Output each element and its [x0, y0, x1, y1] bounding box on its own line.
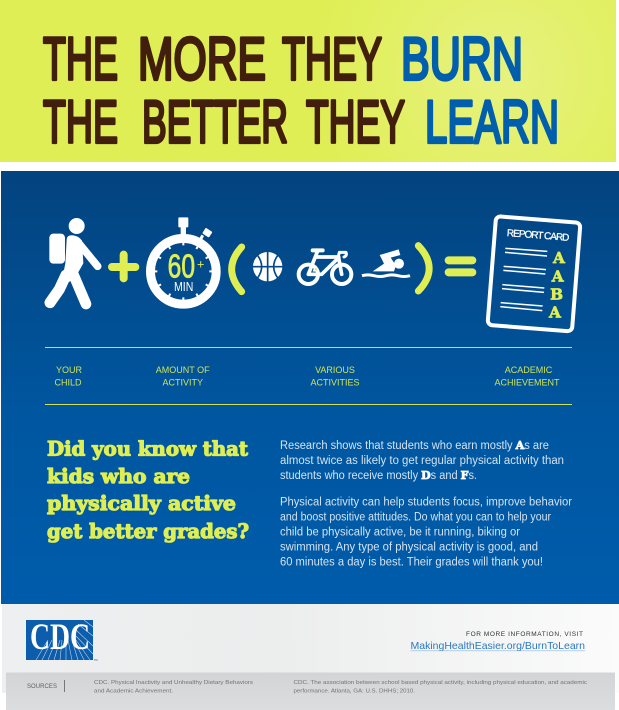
- title: MORE: [138, 26, 266, 93]
- icon: stopwatch 60+ min: [150, 217, 216, 304]
- title: [43, 26, 559, 156]
- source citation 2: [294, 680, 587, 694]
- labels row: CHILD: [54, 378, 82, 388]
- icon: left parenthesis: [232, 247, 242, 292]
- title: BURN: [401, 26, 523, 93]
- body text paragraph 2: [280, 496, 572, 568]
- title: THE: [43, 88, 118, 156]
- question heading: [47, 436, 249, 543]
- body text paragraph 2: swimming. Any type of physical activity is good, and: [280, 542, 538, 554]
- body text paragraph 1: students who receive mostly Ds and Fs.: [280, 468, 477, 482]
- CDC logo: CDC: [30, 617, 90, 658]
- icon: plus: [112, 255, 135, 278]
- labels row: ACHIEVEMENT: [494, 378, 560, 388]
- title: THEY: [282, 26, 382, 93]
- icon: equals: [449, 260, 472, 272]
- labels row: ACTIVITY: [162, 378, 203, 388]
- labels row: ACTIVITIES: [310, 378, 360, 388]
- icon: swimmer: [362, 249, 410, 276]
- body text paragraph 1: Research shows that students who earn mostly As are: [280, 438, 549, 452]
- source citation 1: [94, 680, 253, 694]
- title: BETTER: [142, 88, 288, 156]
- body text paragraph 2: child be physically active, be it running, biking or: [280, 526, 520, 538]
- icon: stopwatch 60+ min: +: [197, 258, 204, 272]
- title: THE: [43, 26, 118, 93]
- sources band: [6, 672, 615, 710]
- source citation 1: CDC. Physical Inactivity and Unhealthy Dietary Behaviors: [94, 680, 253, 686]
- body text paragraph 1: [280, 438, 564, 482]
- sources label: SOURCES: [27, 684, 57, 690]
- icon: report card: A: [552, 249, 566, 267]
- link underline: [410, 650, 585, 652]
- labels row: YOUR: [56, 365, 82, 375]
- divider bottom: [45, 404, 572, 405]
- question heading: kids who are: [47, 464, 190, 488]
- website link: MakingHealthEasier.org/BurnToLearn: [410, 640, 585, 652]
- question heading: get better grades?: [47, 519, 249, 543]
- for more information: FOR MORE INFORMATION, VISIT: [466, 631, 583, 638]
- CDC logo: TM: [94, 659, 98, 662]
- icon: stopwatch 60+ min: 60: [168, 248, 195, 285]
- icon: bicycle: [299, 250, 351, 284]
- icon: report card: A: [548, 304, 562, 322]
- header banner: [0, 0, 616, 162]
- labels row: AMOUNT OF: [156, 365, 210, 375]
- body text paragraph 2: 60 minutes a day is best. Their grades will thank you!: [280, 556, 543, 568]
- title: THEY: [306, 88, 405, 156]
- question heading: Did you know that: [47, 436, 249, 460]
- source citation 2: performance. Atlanta, GA: U.S. DHHS; 2010.: [294, 688, 415, 694]
- labels row: [54, 365, 560, 388]
- labels row: VARIOUS: [315, 365, 355, 375]
- panel: blue main: [1, 171, 619, 604]
- equation icons: [49, 216, 580, 331]
- icon: report card: B: [550, 285, 563, 303]
- divider top: [45, 347, 572, 348]
- sources divider: [64, 680, 65, 692]
- labels row: ACADEMIC: [505, 365, 553, 375]
- icon: stopwatch 60+ min: MIN: [174, 279, 193, 294]
- icon: report card: A: [551, 268, 565, 286]
- source citation 2: CDC. The association between school based physical activity, including physical education, and academic: [294, 680, 587, 686]
- body text paragraph 2: Physical activity can help students focus, improve behavior: [280, 496, 572, 508]
- icon: report card: REPORT CARD: [506, 228, 570, 244]
- icon: report card: [488, 216, 580, 331]
- question heading: physically active: [47, 491, 236, 515]
- body text paragraph 1: almost twice as likely to get regular physical activity than: [280, 455, 564, 467]
- source citation 1: and Academic Achievement.: [94, 688, 173, 694]
- icon: right parenthesis: [418, 246, 429, 291]
- body text paragraph 2: and boost positive attitudes. Do what you can to help your: [280, 512, 551, 524]
- icon: child walking with backpack: [49, 218, 98, 304]
- icon: basketball: [253, 252, 283, 282]
- footer panel: [2, 604, 619, 693]
